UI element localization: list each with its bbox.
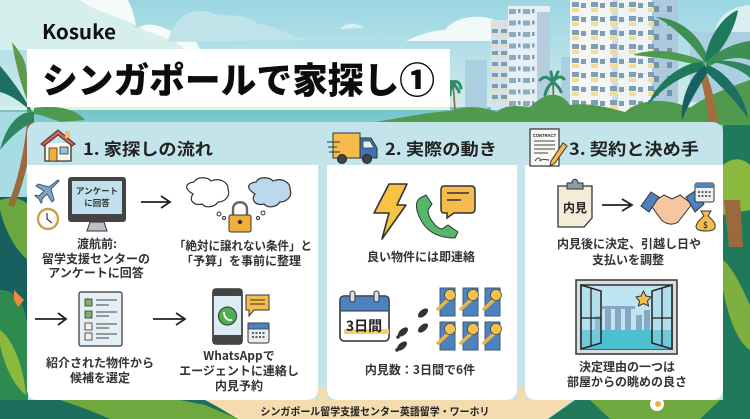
- text: decide after viewing: 内見後に決定、引越し日や: [557, 235, 701, 252]
- text: contact immediately: 良い物件には即連絡: [367, 248, 475, 265]
- panel: 3. contract and deciding factor: [525, 129, 723, 400]
- text: before departure: アンケートに回答: [48, 264, 144, 281]
- arrow: [602, 199, 632, 211]
- sand between cards: [318, 388, 525, 400]
- heading 2: 2. 実際の動き: [385, 136, 497, 160]
- text: WhatsApp contact: [179, 347, 299, 394]
- arrow: [35, 313, 66, 325]
- text: viewing count: 内見数：3日間で6件: [365, 361, 475, 378]
- text: decide after viewing: 支払いを調整: [592, 251, 664, 268]
- text: choose candidates: 紹介された物件から: [46, 354, 154, 371]
- text: before departure: 留学支援センターの: [42, 250, 150, 267]
- flower: [650, 397, 664, 411]
- icon: delivery truck: [327, 133, 377, 164]
- author name: Kosuke: [42, 16, 116, 45]
- background: left sea band: [0, 112, 30, 222]
- card 3 background: [525, 165, 723, 400]
- icon: six doors with keys: [438, 288, 502, 350]
- background: tree line: [375, 80, 750, 125]
- heading 3: 3. 契約と決め手: [569, 136, 699, 160]
- icon: phone with WhatsApp: [213, 289, 269, 344]
- building: left tower: [491, 6, 550, 110]
- text: reason for decision: [567, 358, 687, 390]
- icon: calendar three days: 3日間: [346, 316, 382, 336]
- arrow: [153, 313, 185, 325]
- icon: money bag: [696, 211, 715, 231]
- icon: speech bubble: [441, 186, 475, 218]
- icon: monitor with survey: [68, 177, 126, 231]
- building: right tower: [570, 0, 678, 112]
- text: WhatsApp contact: 内見予約: [215, 377, 263, 394]
- icon: footprints: [395, 307, 430, 352]
- arrow: [141, 196, 170, 208]
- icon: handshake: [641, 191, 704, 224]
- background: sea: [0, 107, 750, 157]
- background: distant towers: [465, 32, 750, 110]
- text: conditions and budget: 「予算」を事前に整理: [181, 252, 301, 269]
- icon: airplane: [35, 180, 59, 203]
- panel: 1. house hunting flow: [27, 130, 318, 400]
- icon: window with Singapore view: [576, 280, 677, 354]
- icon: clock: [38, 209, 58, 229]
- background: clouds: [0, 0, 750, 50]
- icon: clipboard viewing: 内見: [563, 199, 587, 216]
- title: シンガポールで家探し①: [42, 52, 435, 104]
- text: before departure: 渡航前:: [77, 235, 117, 252]
- icon: clouds and padlock: [187, 178, 291, 232]
- text: before departure: [42, 235, 150, 281]
- background: right jungle: [548, 125, 750, 419]
- card 1 background: [27, 165, 318, 400]
- icon: contract document: CONTRACT: [533, 133, 557, 138]
- icon: house: [41, 130, 75, 161]
- text: WhatsApp contact: エージェントに連絡し: [179, 362, 299, 379]
- icon: clipboard viewing: [558, 179, 592, 227]
- icon: contract document: [530, 129, 567, 166]
- text: WhatsApp contact: WhatsAppで: [203, 347, 275, 364]
- icon: checklist: [79, 292, 122, 346]
- icon: money bag: $: [703, 220, 708, 231]
- panel: blue backing: [27, 122, 723, 400]
- small palm trees: [448, 72, 564, 112]
- left palm: [0, 42, 85, 207]
- text: conditions and budget: [174, 237, 312, 269]
- right palm: [633, 10, 750, 125]
- background: left jungle: [0, 197, 240, 419]
- icon: monitor with survey: アンケート: [76, 185, 118, 197]
- card 2 background: [327, 165, 517, 400]
- text: conditions and budget: 「絶対に譲れない条件」と: [174, 237, 312, 254]
- footer credit: シンガポール留学支援センター英語留学・ワーホリ: [260, 404, 490, 419]
- text: reason for decision: 部屋からの眺めの良さ: [567, 373, 687, 390]
- icon: green telephone: [416, 195, 458, 238]
- panel: 2. actual actions: [327, 133, 517, 400]
- icon: calendar three days: [340, 291, 389, 341]
- text: choose candidates: 候補を選定: [70, 369, 130, 386]
- text: decide after viewing: [557, 235, 701, 268]
- text: choose candidates: [46, 354, 154, 386]
- icon: monitor with survey: に回答: [84, 197, 110, 209]
- heading 1: 1. 家探しの流れ: [83, 136, 214, 160]
- icon: calendar: [695, 183, 714, 202]
- background: sand strip: [203, 398, 575, 419]
- icon: lightning bolt: [374, 184, 407, 239]
- text: reason for decision: 決定理由の一つは: [579, 358, 675, 375]
- background: sky: [0, 0, 750, 112]
